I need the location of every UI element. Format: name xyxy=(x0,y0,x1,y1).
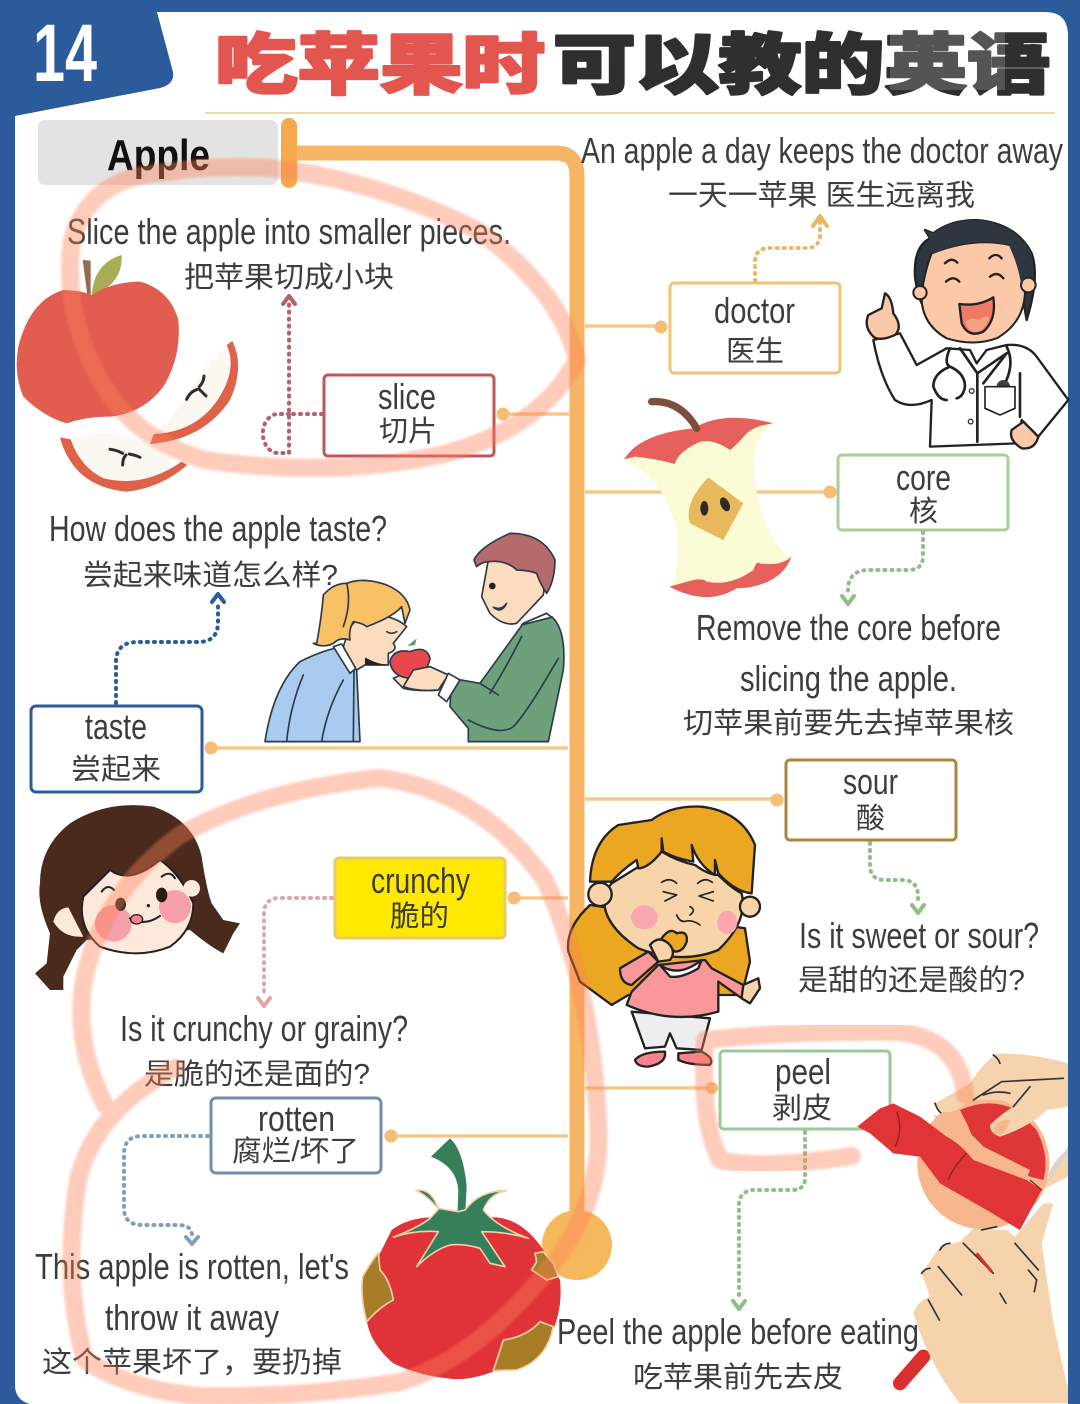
panel: crunchy xyxy=(35,805,568,1091)
dotted arrow xyxy=(733,1132,805,1309)
box: taste: taste xyxy=(85,706,147,747)
box: taste: 尝起来 xyxy=(71,753,161,786)
dotted arrow xyxy=(258,898,332,1006)
sentence: peel before eating: Peel the apple before eating xyxy=(557,1311,919,1352)
sentence: sweet or sour: 是甜的还是酸的? xyxy=(798,964,1025,997)
sentence: remove the core: Remove the core before xyxy=(696,607,1001,648)
title xyxy=(215,28,1050,102)
sentence: remove the core: slicing the apple. xyxy=(740,658,957,699)
connector xyxy=(211,746,568,750)
highlighter scribble: peel xyxy=(704,1032,965,1164)
illustration: apple core xyxy=(624,402,792,597)
panel: core xyxy=(585,402,1014,740)
illustration: girl tasting sour apple xyxy=(568,806,760,1067)
main branch line xyxy=(281,118,612,1280)
sentence: peel before eating xyxy=(557,1311,919,1394)
box: crunchy xyxy=(335,858,505,938)
box: doctor: doctor xyxy=(714,290,795,331)
box: slice xyxy=(324,375,494,456)
connector xyxy=(585,324,661,328)
title: 吃苹果时 xyxy=(215,28,545,102)
illustration: doctor xyxy=(867,220,1068,448)
box: rotten xyxy=(211,1098,381,1173)
sentence: this apple is rotten: 这个苹果坏了，要扔掉 xyxy=(42,1346,342,1379)
box: crunchy: 脆的 xyxy=(390,900,449,933)
box: doctor xyxy=(670,283,840,373)
box: peel: 剥皮 xyxy=(772,1092,832,1125)
connector xyxy=(391,1134,568,1138)
connector xyxy=(585,490,830,494)
sentence: crunchy or grainy: Is it crunchy or grainy? xyxy=(120,1008,408,1049)
dotted arrow xyxy=(870,843,924,913)
dotted arrow xyxy=(755,216,827,281)
illustration: apple and slices xyxy=(17,255,238,492)
connector xyxy=(585,797,777,801)
sentence: crunchy or grainy xyxy=(120,1008,408,1091)
dotted arrow xyxy=(124,1136,208,1244)
box: crunchy: crunchy xyxy=(371,860,470,901)
sentence: sweet or sour xyxy=(798,915,1039,997)
sentence: remove the core: 切苹果前要先去掉苹果核 xyxy=(683,707,1014,740)
panel: sour xyxy=(568,760,1039,1067)
connector xyxy=(585,1086,712,1090)
sentence: how does it taste: How does the apple taste? xyxy=(49,508,387,549)
sentence: slice the apple: 把苹果切成小块 xyxy=(184,261,394,294)
box: taste xyxy=(31,706,202,792)
panel: rotten xyxy=(35,1098,568,1379)
panel: peel xyxy=(557,1051,1080,1403)
dotted arrow xyxy=(263,296,322,453)
box: core: core xyxy=(896,457,951,498)
box: slice: slice xyxy=(378,376,436,417)
illustration: girl with tongue out xyxy=(35,805,240,990)
sentence: crunchy or grainy: 是脆的还是面的? xyxy=(144,1058,370,1091)
box: peel xyxy=(720,1051,890,1129)
box: core: 核 xyxy=(909,495,938,528)
box: doctor: 医生 xyxy=(726,335,784,368)
box: sour: sour xyxy=(843,761,898,802)
box: rotten: 腐烂/坏了 xyxy=(232,1135,359,1168)
connector xyxy=(503,412,570,416)
panel: taste xyxy=(31,508,568,792)
illustration: boy and girl with apple xyxy=(265,533,564,742)
sentence: slice the apple: Slice the apple into smaller pieces. xyxy=(67,211,511,252)
title rule xyxy=(205,112,1055,114)
sentence: an apple a day: 一天一苹果 医生远离我 xyxy=(668,179,975,212)
box: slice: 切片 xyxy=(379,415,437,448)
heading: Apple xyxy=(38,120,278,185)
sentence: slice the apple xyxy=(67,211,511,294)
sentence: remove the core xyxy=(683,607,1014,740)
box: peel: peel xyxy=(775,1051,831,1092)
sentence: how does it taste xyxy=(49,508,387,592)
dotted arrow xyxy=(116,594,224,703)
illustration: rotten apple xyxy=(362,1138,561,1379)
connector xyxy=(514,896,568,900)
box: sour: 酸 xyxy=(856,802,885,835)
sentence: peel before eating: 吃苹果前先去皮 xyxy=(633,1361,843,1394)
heading: Apple: Apple xyxy=(107,131,210,180)
highlighter scribble: upper loop xyxy=(70,167,577,468)
sentence: how does it taste: 尝起来味道怎么样? xyxy=(83,559,338,592)
sentence: this apple is rotten xyxy=(35,1246,349,1379)
box: rotten: rotten xyxy=(258,1098,335,1139)
sentence: this apple is rotten: This apple is rotten, let's xyxy=(35,1246,349,1287)
box: sour xyxy=(786,760,956,840)
title watermark xyxy=(890,28,1005,90)
sentence: an apple a day xyxy=(581,130,1063,212)
title: 可以教的英语 xyxy=(553,28,1050,102)
box: core xyxy=(838,455,1008,530)
number badge: 14 xyxy=(33,8,97,99)
dotted arrow xyxy=(842,532,923,604)
highlighter scribble: lower loop xyxy=(71,778,599,1396)
sentence: this apple is rotten: throw it away xyxy=(105,1297,279,1338)
illustration: hands peeling apple xyxy=(857,1053,1080,1403)
panel: doctor xyxy=(581,130,1068,448)
panel: slice xyxy=(17,211,570,492)
